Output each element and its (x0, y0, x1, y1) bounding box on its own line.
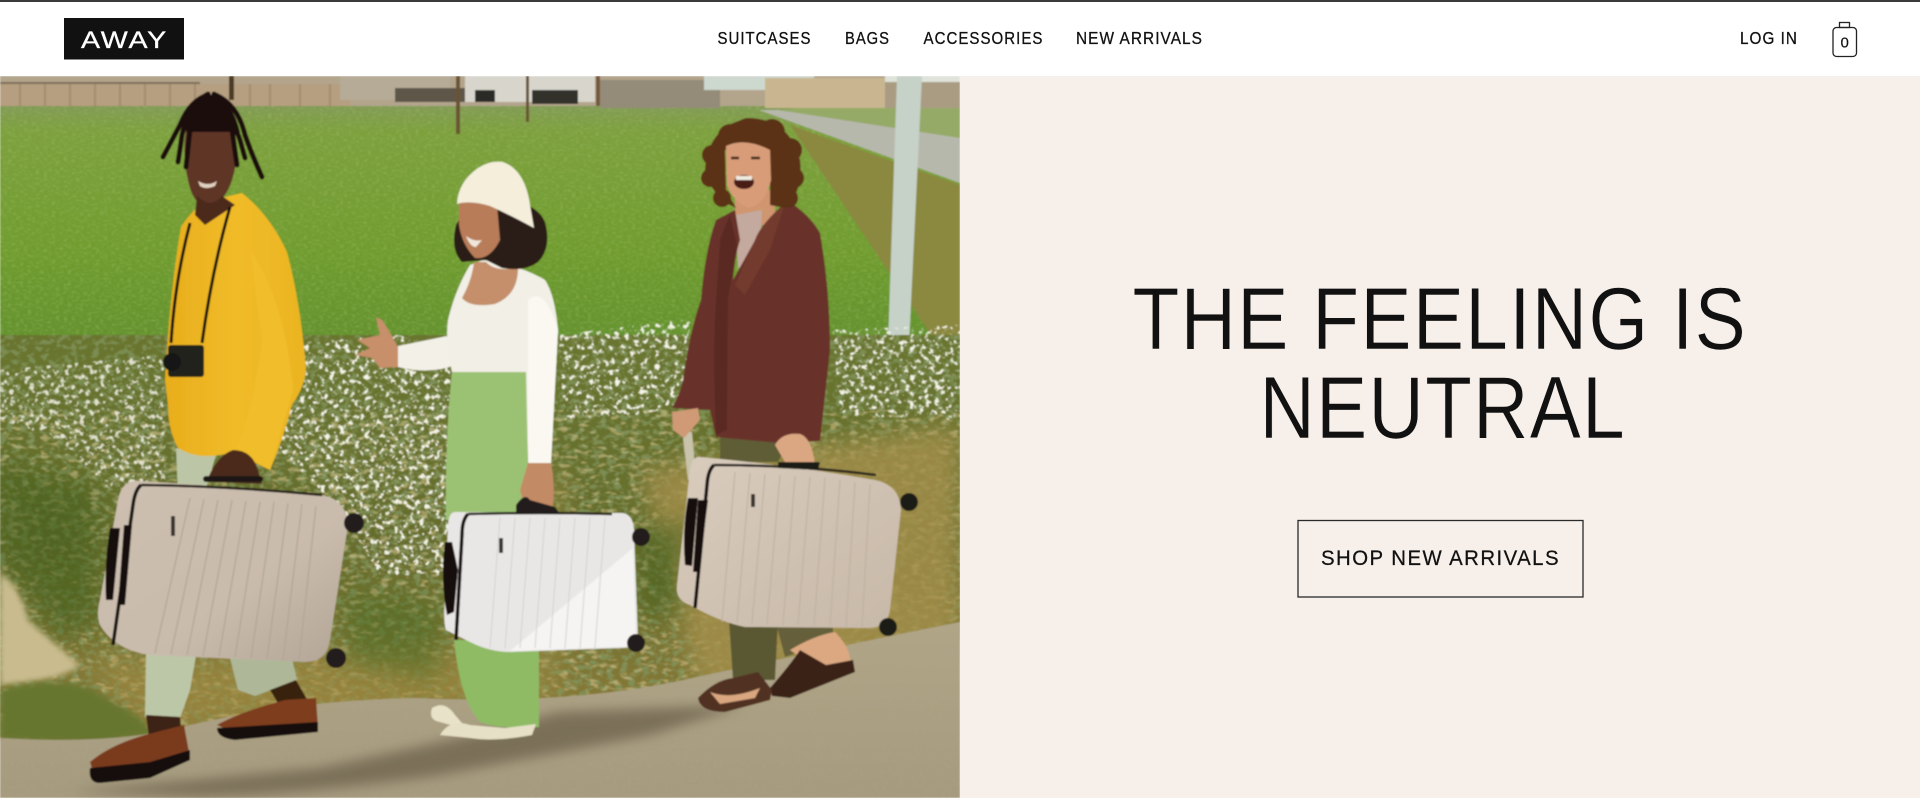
laughing mouth (734, 175, 754, 189)
ankles and shoes (145, 714, 182, 735)
person left: yellow sweater (90, 94, 318, 783)
logo: AWAY: AWAY (81, 27, 168, 54)
jacket (672, 200, 830, 443)
gesturing hand (355, 317, 398, 368)
eyes (731, 157, 760, 159)
face and neck (184, 124, 236, 207)
top edge bar (0, 0, 1920, 2)
hands (775, 434, 815, 465)
camera strap (171, 207, 230, 343)
hand on handle (208, 450, 262, 484)
nav link: new arrivals: NEW ARRIVALS (1076, 28, 1203, 48)
neckline skin (462, 262, 518, 305)
scene: distant fence and buildings (0, 76, 960, 134)
scene: grass field (0, 105, 960, 336)
neck and inner shirt (735, 190, 775, 225)
nav link: suitcases: SUITCASES (718, 28, 812, 48)
nav link: accessories: ACCESSORIES (924, 28, 1044, 48)
hero photo: three travellers carrying suitcases (0, 76, 960, 798)
icon: suitcase cart with count (1833, 22, 1856, 56)
logo: AWAY (64, 18, 184, 60)
header navigation (64, 18, 1856, 60)
legs and sandals (790, 632, 850, 668)
shoes (430, 704, 462, 726)
suitcase right: taupe (677, 457, 918, 636)
scene: roadside vegetation (0, 335, 960, 740)
person middle: white hat and green trousers (355, 162, 558, 739)
button: shop new arrivals (1298, 520, 1583, 597)
scene: road (759, 110, 960, 183)
scene: verge and right-side grass (778, 108, 960, 345)
hanging luggage strap (682, 430, 696, 480)
button: shop new arrivals: SHOP NEW ARRIVALS (1321, 547, 1560, 570)
hair (454, 200, 547, 269)
scene: lamp pole (888, 76, 922, 345)
panel: headline background (960, 76, 1920, 798)
face (459, 198, 500, 258)
heading: the feeling is neutral: THE FEELING IS (1132, 269, 1747, 368)
face (726, 142, 771, 208)
scene: sandy patch (0, 572, 80, 684)
icon: suitcase cart with count: 0 (1841, 34, 1849, 52)
trousers (175, 447, 216, 487)
yellow sweater (165, 193, 306, 470)
nav link: bags: BAGS (845, 28, 890, 48)
scene: pavement (0, 622, 960, 798)
hat (457, 162, 534, 228)
heading: the feeling is neutral: NEUTRAL (1260, 358, 1626, 457)
scene: grass clump bottom-left (0, 682, 150, 745)
scene: white flowers (0, 318, 960, 575)
camera (163, 345, 204, 377)
suitcase left: taupe (98, 476, 364, 668)
account link: log in: LOG IN (1740, 28, 1798, 48)
hair: curls (701, 118, 804, 208)
scene: shadow on pavement (70, 705, 745, 796)
suitcase middle: white (443, 497, 650, 652)
trousers (446, 368, 528, 520)
hair: dreadlocks (163, 94, 262, 177)
trousers (720, 436, 782, 462)
hand on handle (520, 463, 554, 510)
arm and sweater (398, 336, 455, 371)
person right: maroon jacket (672, 118, 855, 712)
heading: the feeling is neutral (1132, 269, 1747, 457)
